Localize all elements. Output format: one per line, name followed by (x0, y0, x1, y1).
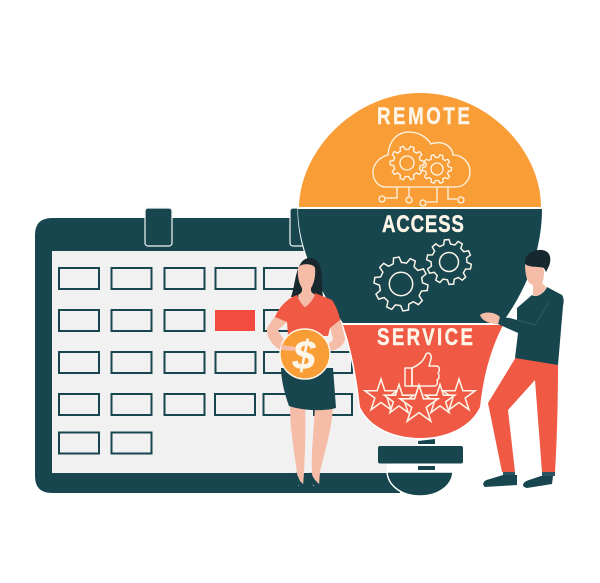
man sleeve highlight (518, 302, 549, 325)
woman skirt (281, 368, 336, 410)
woman legs (290, 405, 333, 486)
cloud outline (373, 132, 470, 187)
woman arms (267, 316, 345, 351)
woman hair (291, 258, 323, 297)
man socks (503, 472, 555, 476)
icon: cloud with gears and circuit (373, 132, 470, 206)
heading: SERVICE: SERVICE (377, 324, 473, 351)
woman with coin (267, 258, 345, 488)
orange section (299, 93, 541, 207)
icon: thumbs up (405, 353, 439, 386)
icon: five stars rating (365, 379, 475, 421)
dark section (298, 209, 542, 323)
highlighted calendar day (215, 310, 255, 331)
woman neck and face (298, 264, 315, 307)
woman top (275, 293, 340, 336)
man trousers (488, 357, 558, 472)
cloud gear right (423, 155, 451, 183)
light bulb (298, 93, 542, 496)
calendar page (52, 251, 417, 473)
man face and neck (525, 260, 546, 296)
man hand (480, 313, 500, 324)
man white gap triangle (510, 308, 517, 320)
calendar body (35, 218, 400, 493)
man sweater (498, 287, 564, 365)
bulb white outline (299, 93, 541, 438)
woman shoes (295, 472, 323, 488)
coin (280, 329, 330, 379)
woman hand (281, 345, 296, 351)
man hair (525, 250, 550, 272)
heading: ACCESS: ACCESS (382, 211, 464, 238)
calendar binding tabs (145, 208, 317, 246)
calendar day cells (59, 268, 352, 454)
man leaning on bulb (480, 250, 564, 488)
cloud gear left (390, 146, 424, 180)
red section (343, 325, 503, 438)
icon: large gear (371, 254, 431, 314)
man shoes (483, 475, 553, 488)
icon: small gear (423, 236, 475, 288)
circuit lines (386, 187, 457, 202)
dollar sign: $ (292, 332, 317, 378)
heading: REMOTE: REMOTE (377, 103, 470, 130)
calendar (35, 208, 417, 493)
bulb base (378, 439, 463, 496)
